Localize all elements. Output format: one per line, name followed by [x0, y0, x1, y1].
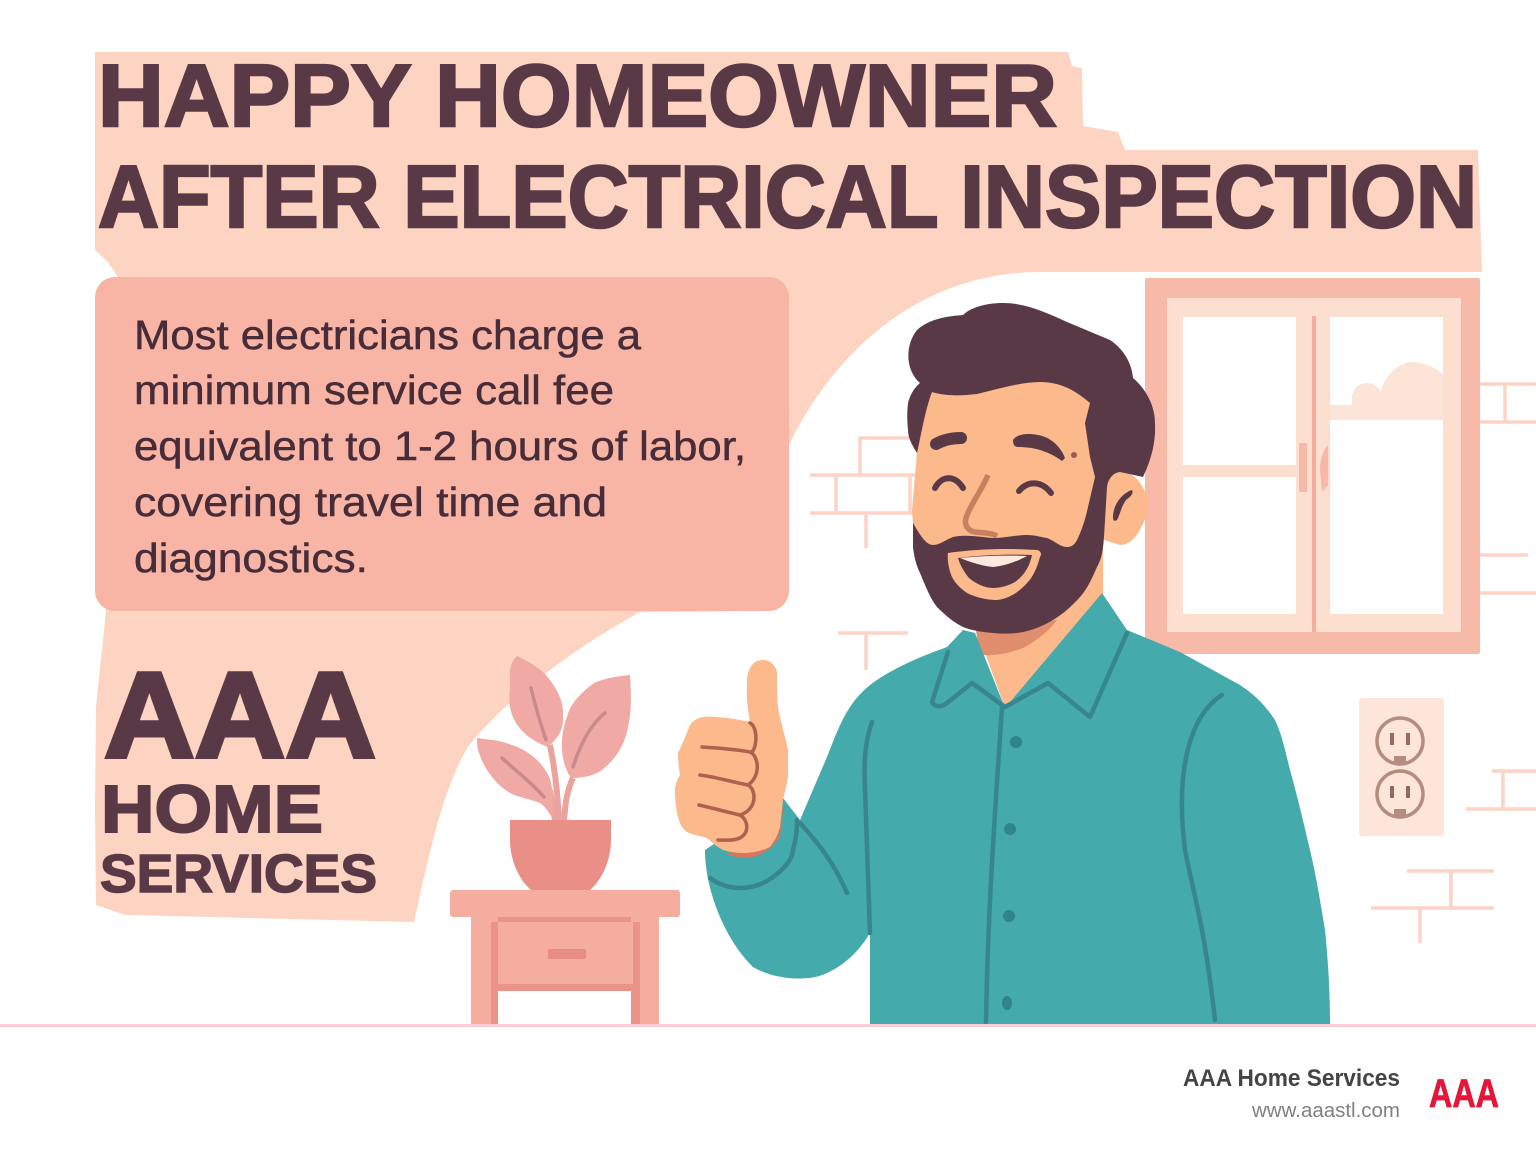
nose: [965, 475, 997, 536]
title: HAPPY HOMEOWNER: [98, 46, 1057, 145]
window: [1145, 278, 1480, 654]
title: [98, 46, 1477, 246]
callout text: covering travel time and: [134, 479, 607, 525]
callout text: minimum service call fee: [134, 367, 614, 413]
face: [912, 382, 1095, 547]
footer website: www.aaastl.com: [1251, 1100, 1400, 1122]
footer AAA logo: AAA: [1429, 1072, 1499, 1116]
hand thumbs up: [675, 660, 788, 857]
smile: [948, 549, 1041, 600]
callout text: equivalent to 1-2 hours of labor,: [134, 423, 746, 469]
brand logo large: SERVICES: [100, 844, 377, 904]
callout panel: [95, 277, 789, 611]
brick wall lines: [810, 384, 1536, 943]
shirt lines: [710, 633, 1222, 1022]
footer company name: AAA Home Services: [1183, 1065, 1400, 1092]
man with thumbs up: [675, 303, 1330, 1024]
brand logo large: HOME: [101, 772, 323, 847]
eyes and brows: [935, 438, 1051, 493]
cloud: [1330, 362, 1443, 420]
callout text: [134, 312, 746, 581]
potted plant: [477, 656, 631, 890]
brand logo large: AAA: [104, 647, 376, 783]
peach background brush shape: [95, 52, 1482, 922]
side table: [450, 890, 680, 1024]
callout text: Most electricians charge a: [134, 312, 641, 358]
hair and beard: [907, 303, 1155, 634]
title: AFTER ELECTRICAL INSPECTION: [98, 147, 1477, 246]
callout text: diagnostics.: [134, 535, 368, 581]
wall outlet: [1359, 698, 1444, 836]
footer divider: [0, 1024, 1536, 1027]
neck: [975, 530, 1103, 708]
ear: [1104, 472, 1149, 545]
shirt: [705, 593, 1330, 1024]
brand logo large: [100, 647, 377, 904]
